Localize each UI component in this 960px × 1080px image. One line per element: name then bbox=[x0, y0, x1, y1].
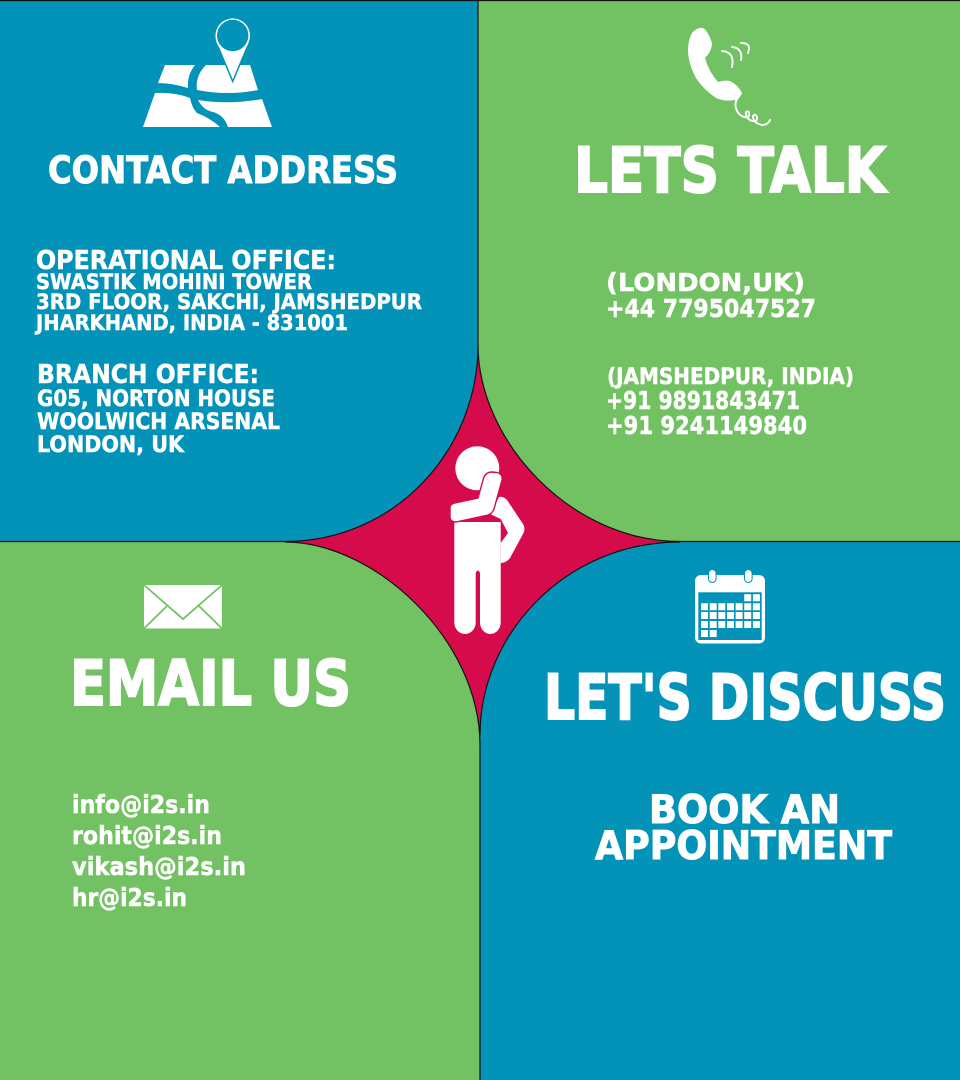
text block: branch office: G05, NORTON HOUSE bbox=[37, 387, 275, 412]
icon: map with location pin bbox=[143, 18, 272, 127]
text block: jamshedpur phones bbox=[606, 365, 854, 440]
person raised arm bbox=[450, 472, 502, 522]
discuss panel shape bbox=[480, 542, 960, 1080]
panel: email us bbox=[0, 542, 480, 1080]
email panel shape bbox=[0, 542, 480, 1080]
text block: london phone: +44 7795047527 bbox=[606, 294, 816, 323]
panel: lets discuss bbox=[480, 542, 960, 1080]
text block: london phone bbox=[606, 268, 816, 323]
text block: jamshedpur phones: +91 9241149840 bbox=[606, 411, 807, 440]
text block: branch office bbox=[37, 360, 280, 458]
icon: telephone handset bbox=[688, 28, 770, 125]
text block: operational office: OPERATIONAL OFFICE: bbox=[36, 246, 336, 276]
icon: calendar bbox=[695, 570, 765, 644]
text block: email addresses: vikash@i2s.in bbox=[72, 852, 246, 881]
contact panel shape bbox=[0, 0, 478, 542]
panel: lets talk bbox=[478, 0, 960, 542]
text block: book an appointment: APPOINTMENT bbox=[595, 824, 892, 869]
text block: operational office: 3RD FLOOR, SAKCHI, JAMSHEDPUR bbox=[36, 290, 422, 314]
text block: branch office: BRANCH OFFICE: bbox=[37, 360, 259, 390]
text block: jamshedpur phones: (JAMSHEDPUR, INDIA) bbox=[607, 365, 854, 390]
text block: london phone: (LONDON,UK) bbox=[606, 268, 805, 297]
icon: thinking person bbox=[450, 446, 524, 634]
text block: operational office bbox=[34, 246, 422, 335]
centre diamond background bbox=[280, 340, 690, 740]
text block: email addresses bbox=[72, 790, 246, 912]
person arm on hip bbox=[490, 497, 524, 563]
text block: book an appointment bbox=[595, 788, 892, 869]
text block: operational office: SWASTIK MOHINI TOWER bbox=[36, 270, 312, 294]
text block: book an appointment: BOOK AN bbox=[649, 788, 840, 833]
text block: operational office: JHARKHAND, INDIA - 831001 bbox=[34, 311, 348, 335]
text block: branch office: LONDON, UK bbox=[37, 433, 185, 458]
panel: contact address bbox=[0, 0, 478, 542]
text block: jamshedpur phones: +91 9891843471 bbox=[606, 386, 800, 415]
heading: email us: EMAIL US bbox=[70, 647, 351, 720]
icon: envelope bbox=[144, 585, 222, 628]
heading: lets talk: LETS TALK bbox=[574, 134, 888, 207]
text block: email addresses: rohit@i2s.in bbox=[72, 821, 222, 850]
heading: contact address: CONTACT ADDRESS bbox=[48, 149, 398, 192]
text block: branch office: WOOLWICH ARSENAL bbox=[37, 410, 280, 435]
text block: email addresses: info@i2s.in bbox=[72, 790, 210, 819]
person body and legs bbox=[454, 522, 501, 634]
person head bbox=[455, 446, 499, 490]
talk panel shape bbox=[478, 0, 960, 542]
text block: email addresses: hr@i2s.in bbox=[72, 883, 187, 912]
